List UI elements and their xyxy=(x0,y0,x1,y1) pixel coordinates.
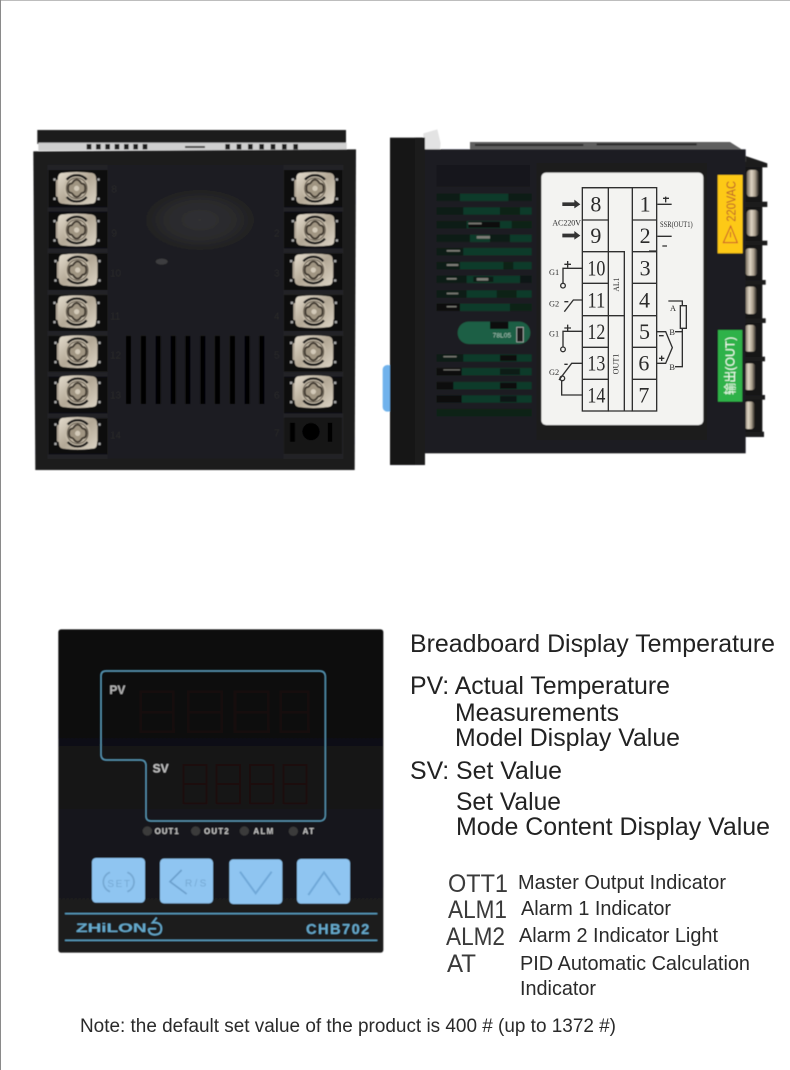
button: down xyxy=(229,859,282,904)
moulded terminal numbers: 2 xyxy=(274,229,280,240)
PV display xyxy=(109,683,308,732)
moulded terminal numbers: 6 xyxy=(274,391,280,402)
wiring labels: B xyxy=(669,363,675,372)
warning label: 220VAC xyxy=(718,175,743,253)
PCB regulator window: 78L05 xyxy=(493,332,511,339)
wiring labels: G1 xyxy=(549,268,559,277)
front bezel xyxy=(390,138,425,465)
moulded terminal numbers: 4 xyxy=(274,311,280,322)
panel: side view of controller xyxy=(383,129,767,465)
button: SET: SET xyxy=(107,879,130,890)
wiring labels: G1 xyxy=(549,330,559,339)
PCB vent slots xyxy=(437,194,532,416)
text block: PV description: Model Display Value xyxy=(455,725,680,752)
warning label: 220VAC: 220VAC xyxy=(724,181,738,222)
wiring labels: OUT1 xyxy=(611,354,620,374)
terminal numbers: 10 xyxy=(587,256,605,281)
text block: SV description: SV: Set Value xyxy=(410,758,562,785)
top strip xyxy=(470,142,742,149)
moulded terminal numbers: 11 xyxy=(110,311,121,322)
output label: 输出(OUT) xyxy=(723,337,738,395)
left terminal block xyxy=(48,165,108,459)
moulded terminal numbers: 5 xyxy=(274,351,280,362)
SV display xyxy=(153,762,307,803)
text block: PV description: Measurements xyxy=(455,700,619,727)
indicator descriptions: Master Output Indicator xyxy=(518,872,726,894)
indicator descriptions: Alarm 2 Indicator Light xyxy=(519,925,718,947)
PCB regulator window xyxy=(458,322,530,344)
indicator lights: OUT1 xyxy=(155,827,179,836)
moulded terminal numbers: 7 xyxy=(274,429,280,440)
PV display: PV xyxy=(109,683,125,697)
terminal numbers: 6 xyxy=(638,351,649,376)
indicator lights: AT xyxy=(303,827,314,836)
text block: SV description: Mode Content Display Value xyxy=(456,814,770,841)
panel: rear view of controller xyxy=(33,130,356,470)
rear terminals xyxy=(743,156,767,437)
indicator names: ALM2 xyxy=(446,923,505,951)
button: up xyxy=(297,859,350,904)
terminal numbers: 3 xyxy=(640,256,651,281)
terminal numbers: 9 xyxy=(590,223,601,248)
terminal numbers xyxy=(587,192,651,407)
wiring labels: AC220V xyxy=(552,218,581,227)
brand strip: ZHiLON xyxy=(76,921,147,935)
moulded terminal numbers: 10 xyxy=(110,269,122,280)
moulded terminal numbers: 8 xyxy=(111,185,117,196)
panel: front face of controller xyxy=(58,629,383,953)
heading: breadboard display temperature: Breadboard Display Temperature xyxy=(410,631,775,658)
wiring labels: SSR(OUT1) xyxy=(660,220,693,229)
indicator lights xyxy=(143,826,314,836)
indicator descriptions: Indicator xyxy=(520,978,596,1000)
wiring labels xyxy=(549,218,693,377)
right terminal block xyxy=(283,165,343,459)
button: SET xyxy=(92,858,145,903)
text block: SV description xyxy=(410,758,770,841)
wiring labels: A xyxy=(670,304,676,313)
SV display: SV xyxy=(153,762,169,776)
wiring labels: AL1 xyxy=(612,278,621,292)
moulded terminal numbers: 3 xyxy=(274,269,280,280)
moulded terminal numbers: 13 xyxy=(110,391,122,402)
rear housing xyxy=(33,130,356,470)
terminal numbers: 14 xyxy=(587,382,605,407)
text block: PV description xyxy=(410,673,680,752)
terminal grid xyxy=(582,188,657,411)
terminal numbers: 7 xyxy=(638,382,649,407)
output label xyxy=(718,330,742,402)
moulded terminal numbers: 9 xyxy=(111,229,117,240)
indicator names: OTT1 xyxy=(448,870,508,898)
terminal numbers: 5 xyxy=(639,319,650,344)
wiring labels: G2 xyxy=(549,368,559,377)
indicator names: AT xyxy=(447,950,476,978)
button: R/S: R/S xyxy=(185,879,207,890)
moulded terminal numbers: 12 xyxy=(110,351,122,362)
indicator lights: OUT2 xyxy=(204,827,229,836)
front fascia xyxy=(58,629,383,953)
terminal numbers: 1 xyxy=(640,192,651,217)
terminal numbers: 13 xyxy=(587,351,605,376)
white label card xyxy=(541,173,703,425)
wiring labels: B xyxy=(669,328,675,337)
wiring labels: G2 xyxy=(549,300,559,309)
text block: SV description: Set Value xyxy=(456,789,561,816)
indicator descriptions: Alarm 1 Indicator xyxy=(521,898,671,920)
indicator descriptions xyxy=(518,872,750,1000)
display outline xyxy=(101,671,325,821)
vent slots xyxy=(126,336,264,404)
wiring symbols xyxy=(559,197,686,395)
footnote: Note: the default set value of the product is 400 # (up to 1372 #) xyxy=(80,1016,616,1037)
terminal numbers: 11 xyxy=(587,287,605,312)
indicator descriptions: PID Automatic Calculation xyxy=(520,953,750,975)
moulded terminal numbers xyxy=(110,185,280,441)
housing body xyxy=(423,149,746,453)
moulded terminal numbers: 14 xyxy=(110,430,122,441)
brand strip: CHB702 xyxy=(306,922,369,938)
indicator lights: ALM xyxy=(253,827,274,836)
indicator names: ALM1 xyxy=(448,896,507,924)
terminal numbers: 4 xyxy=(639,287,650,312)
terminal numbers: 8 xyxy=(590,192,601,217)
indicator names xyxy=(446,870,508,978)
text block: PV description: PV: Actual Temperature xyxy=(410,673,670,700)
top clip xyxy=(423,129,441,149)
terminal numbers: 12 xyxy=(587,319,605,344)
brand strip xyxy=(65,913,377,941)
input arrows xyxy=(562,200,580,240)
button: R/S xyxy=(160,859,213,903)
terminal numbers: 2 xyxy=(640,223,651,248)
wiring diagram xyxy=(549,188,693,411)
blue key edge xyxy=(383,365,393,412)
